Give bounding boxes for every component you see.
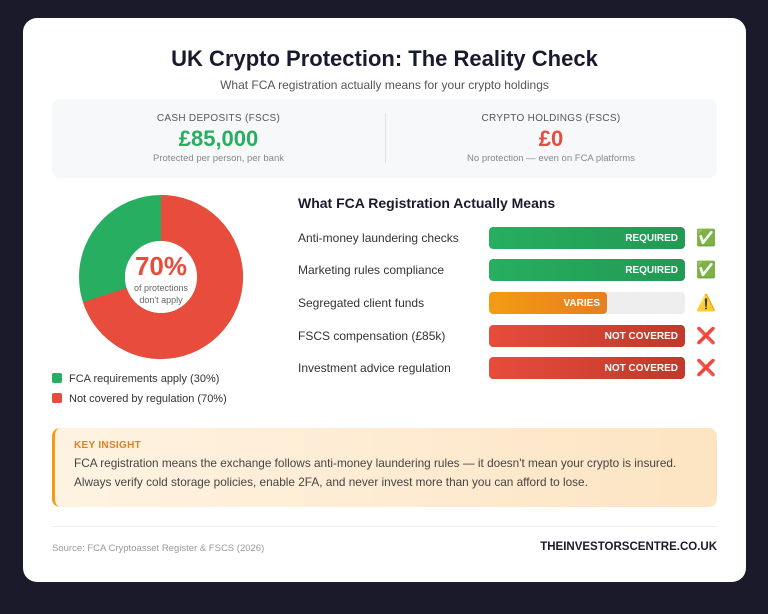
stat: crypto holdings: No protection — even on FCA platforms bbox=[467, 153, 635, 164]
stats panel bbox=[52, 99, 717, 178]
stat: cash deposits bbox=[153, 113, 284, 164]
stat: cash deposits: CASH DEPOSITS (FSCS) bbox=[157, 113, 280, 124]
callout: key insight bbox=[52, 428, 717, 507]
callout: key insight: KEY INSIGHT bbox=[74, 440, 141, 451]
row: AML bbox=[298, 227, 716, 249]
row: marketing: ✅ bbox=[696, 262, 716, 279]
subtitle: What FCA registration actually means for your crypto holdings bbox=[220, 78, 549, 92]
donut chart: don't apply bbox=[139, 295, 183, 305]
legend: FCA requirements apply (30%) bbox=[69, 373, 219, 385]
stat: crypto holdings: £0 bbox=[539, 126, 563, 151]
row: investment advice: Investment advice regulation bbox=[298, 361, 451, 375]
row: investment advice: NOT COVERED bbox=[605, 362, 678, 374]
heading: FCA registration: What FCA Registration Actually Means bbox=[298, 195, 555, 211]
row: marketing: Marketing rules compliance bbox=[298, 263, 444, 277]
row: investment advice bbox=[298, 357, 716, 379]
legend bbox=[52, 373, 227, 405]
legend: Not covered by regulation (70%) bbox=[69, 393, 227, 405]
callout: key insight: Always verify cold storage policies, enable 2FA, and never invest more than you can afford to lose. bbox=[74, 475, 588, 489]
row: marketing: REQUIRED bbox=[625, 264, 678, 276]
row: FSCS: ❌ bbox=[696, 328, 716, 345]
row: AML: Anti-money laundering checks bbox=[298, 231, 459, 245]
stat: cash deposits: Protected per person, per bank bbox=[153, 153, 284, 164]
callout: key insight: FCA registration means the exchange follows anti-money laundering rules — it doesn't mean your crypto is insured. bbox=[74, 456, 676, 470]
row: AML: ✅ bbox=[696, 230, 716, 247]
row: AML: REQUIRED bbox=[625, 232, 678, 244]
row: FSCS: NOT COVERED bbox=[605, 330, 678, 342]
stat: crypto holdings: CRYPTO HOLDINGS (FSCS) bbox=[481, 113, 621, 124]
stat: cash deposits: £85,000 bbox=[179, 126, 258, 151]
row: segregated: Segregated client funds bbox=[298, 296, 424, 310]
footer brand: THEINVESTORSCENTRE.CO.UK bbox=[540, 541, 717, 553]
donut chart: of protections bbox=[134, 283, 189, 293]
title: UK Crypto Protection: The Reality Check bbox=[171, 46, 598, 71]
row: segregated bbox=[298, 292, 716, 314]
row: segregated: VARIES bbox=[564, 298, 600, 308]
row: FSCS: FSCS compensation (£85k) bbox=[298, 329, 445, 343]
row: investment advice: ❌ bbox=[696, 360, 716, 377]
footer source: Source: FCA Cryptoasset Register & FSCS (2026) bbox=[52, 543, 264, 554]
stat: crypto holdings bbox=[467, 113, 635, 164]
row: segregated: ⚠️ bbox=[696, 295, 716, 312]
donut chart bbox=[79, 195, 243, 359]
row: marketing bbox=[298, 259, 716, 281]
donut chart: 70% bbox=[135, 251, 187, 281]
row: FSCS bbox=[298, 325, 716, 347]
